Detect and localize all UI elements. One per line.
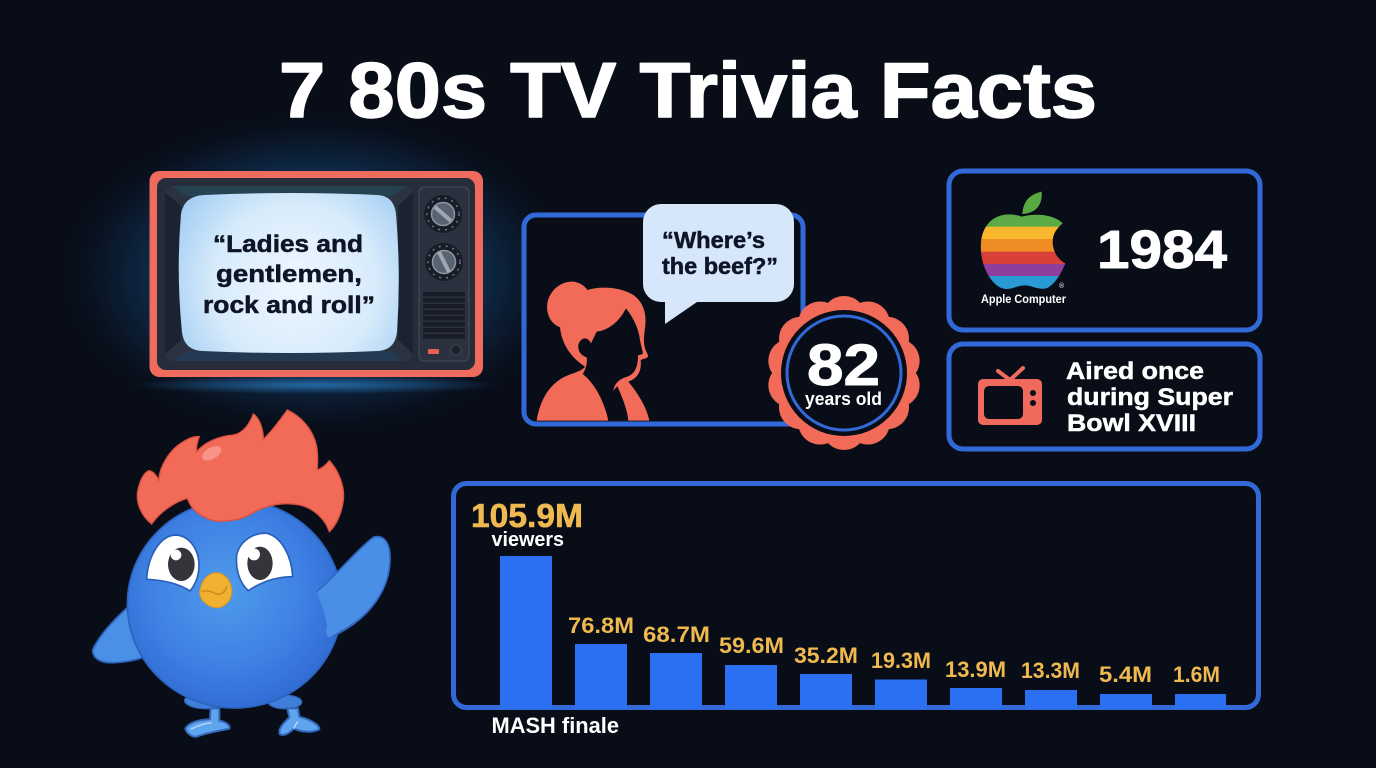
- chart frame: [454, 484, 1258, 708]
- right wing: [317, 537, 390, 637]
- bars: [500, 556, 1226, 709]
- badge: 82 years old: years old: [805, 389, 882, 409]
- beak: [200, 573, 232, 608]
- power light: [428, 349, 439, 354]
- speech bubble with quote: [643, 204, 794, 324]
- value labels: 68.7M: [643, 622, 710, 647]
- comb highlight: [200, 443, 224, 464]
- retro television: [150, 171, 483, 377]
- value labels: 5.4M: [1099, 662, 1152, 687]
- icon: small tv: [978, 368, 1042, 425]
- aired once text: during Super: [1067, 384, 1233, 411]
- floor glow under tv: [131, 376, 501, 394]
- tv screen with quote: [179, 193, 399, 353]
- tv glow: [54, 109, 578, 439]
- speaker grille: [423, 292, 465, 338]
- mascot: blue bird: [93, 410, 390, 737]
- value labels: 19.3M: [871, 648, 931, 673]
- legs and feet: [185, 693, 319, 737]
- value labels: 13.3M: [1021, 658, 1080, 683]
- panel: apple 1984: [949, 171, 1260, 330]
- comb: [137, 410, 344, 532]
- aired once text: Bowl XVIII: [1067, 410, 1196, 437]
- aired once text: [1066, 358, 1233, 437]
- badge: 82 years old: 82: [807, 333, 880, 398]
- body: [127, 500, 342, 708]
- panel: where's the beef: [524, 204, 803, 424]
- registered mark: ®: [1059, 282, 1065, 290]
- panel: viewers bar chart: [454, 484, 1258, 738]
- woman silhouette: [537, 282, 649, 421]
- speech bubble with quote: “Where’s: [662, 227, 765, 253]
- top value: 105.9M: [471, 497, 583, 534]
- value labels: 59.6M: [719, 633, 784, 658]
- panel: super bowl: [949, 344, 1260, 449]
- knob 1: [424, 195, 462, 233]
- tv screen with quote: “Ladies and: [213, 231, 363, 258]
- right eye: [236, 533, 293, 591]
- power button: [451, 345, 461, 355]
- value labels: 13.9M: [945, 657, 1006, 682]
- year: 1984: [1097, 220, 1227, 280]
- value labels: 1.6M: [1173, 662, 1220, 687]
- tv bezel: [165, 186, 413, 361]
- icon: rainbow apple logo: [980, 192, 1066, 289]
- tv control panel: [419, 187, 469, 361]
- viewers label: viewers: [492, 529, 564, 551]
- knob 2: [425, 243, 463, 281]
- mash finale label: MASH finale: [492, 713, 619, 738]
- tv screen with quote: gentlemen,: [216, 261, 362, 288]
- badge: 82 years old: [764, 294, 924, 452]
- speech bubble with quote: the beef?”: [662, 253, 778, 279]
- left wing: [93, 607, 143, 663]
- apple computer label: Apple Computer: [981, 292, 1066, 306]
- tv screen with quote: rock and roll”: [203, 292, 375, 319]
- value labels: 35.2M: [794, 643, 858, 668]
- value labels: [568, 613, 1220, 687]
- tv cabinet: [150, 171, 483, 377]
- aired once text: Aired once: [1066, 358, 1204, 385]
- left eye: [147, 535, 199, 591]
- value labels: 76.8M: [568, 613, 634, 638]
- title: 7 80s TV Trivia Facts: [279, 46, 1097, 134]
